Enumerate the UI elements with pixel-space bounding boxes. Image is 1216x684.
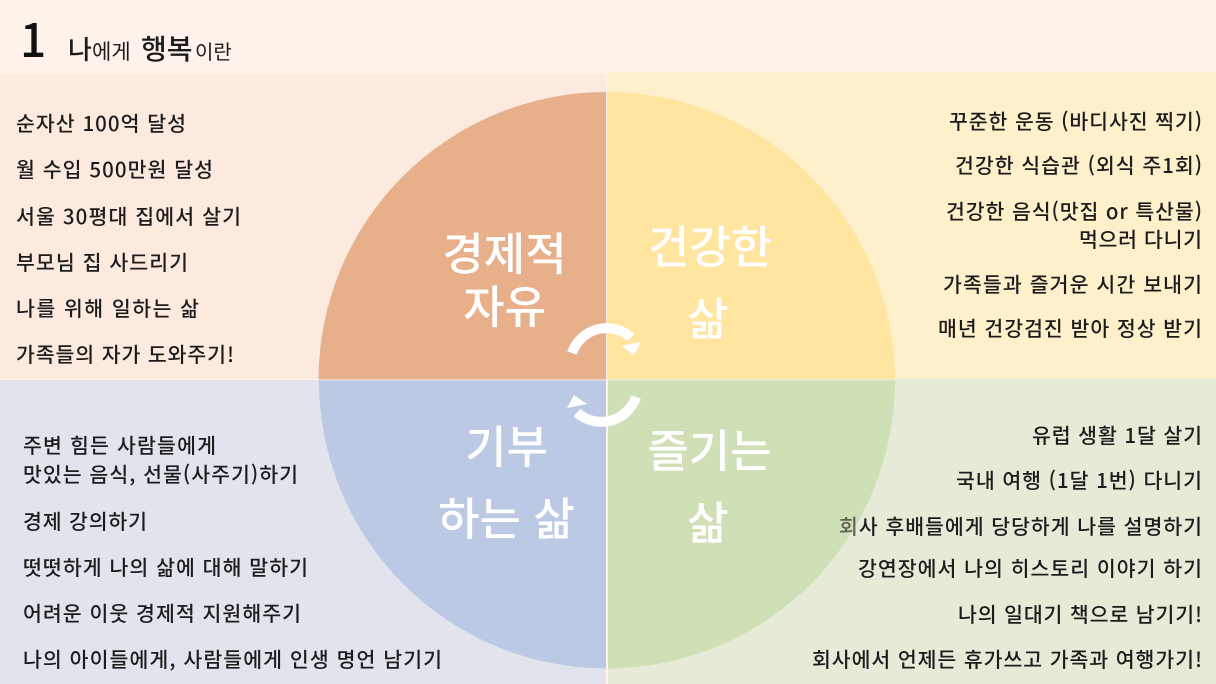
text block: enjoyment goals: 국내 여행 (1달 1번) 다니기	[956, 464, 1202, 494]
text block: enjoyment goals: 나의 일대기 책으로 남기기!	[958, 598, 1202, 628]
text block: health goals: 매년 건강검진 받아 정상 받기	[938, 312, 1202, 342]
label: economic freedom: 경제적	[442, 218, 567, 283]
text block: economic freedom goals: 서울 30평대 집에서 살기	[16, 200, 241, 230]
text block: health goals	[938, 105, 1202, 342]
text block: giving goals: 맛있는 음식, 선물(사주기)하기	[23, 458, 298, 488]
label: giving life: 기부	[465, 411, 548, 476]
label: giving life: 하는 삶	[438, 483, 575, 548]
text block: health goals: 가족들과 즐거운 시간 보내기	[943, 268, 1202, 298]
text block: economic freedom goals: 가족들의 자가 도와주기!	[16, 338, 234, 368]
text block: giving goals: 주변 힘든 사람들에게	[23, 429, 216, 459]
quadrant: giving life	[319, 380, 606, 668]
text block: economic freedom goals: 순자산 100억 달성	[16, 107, 186, 137]
label: enjoying life: 삶	[687, 487, 729, 552]
text block: economic freedom goals	[16, 107, 241, 368]
panel: top left background	[0, 74, 606, 379]
text block: giving goals: 나의 아이들에게, 사람들에게 인생 명언 남기기	[23, 643, 442, 673]
quadrant: economic freedom	[318, 92, 606, 380]
quadrant: enjoying life	[608, 380, 895, 668]
text block: giving goals: 경제 강의하기	[23, 505, 147, 535]
text block: giving goals	[23, 429, 442, 673]
text block: giving goals: 떳떳하게 나의 삶에 대해 말하기	[23, 551, 308, 581]
panel: top right background	[607, 72, 1216, 379]
text block: enjoyment goals: 강연장에서 나의 히스토리 이야기 하기	[858, 552, 1202, 582]
text block: economic freedom goals: 월 수입 500만원 달성	[16, 153, 213, 183]
arrow: lower clockwise	[567, 395, 636, 422]
text block: giving goals: 어려운 이웃 경제적 지원해주기	[23, 597, 301, 627]
title: 나	[68, 30, 92, 67]
label: giving life	[438, 411, 575, 548]
label: economic freedom	[442, 218, 567, 336]
title: 1	[20, 5, 46, 71]
panel: bottom right background	[608, 379, 1216, 684]
title: 이란	[195, 36, 232, 65]
title	[20, 5, 232, 71]
panel: bottom left background	[0, 380, 606, 684]
arrow: upper clockwise	[572, 328, 641, 355]
quadrant: healthy life	[607, 92, 895, 379]
label: healthy life	[648, 211, 772, 348]
text block: health goals: 먹으러 다니기	[1079, 223, 1202, 253]
label: enjoying life	[647, 415, 772, 552]
text block: economic freedom goals: 부모님 집 사드리기	[16, 246, 188, 276]
text block: health goals: 꾸준한 운동 (바디사진 찍기)	[949, 105, 1202, 135]
text block: economic freedom goals: 나를 위해 일하는 삶	[16, 292, 199, 322]
label: economic freedom: 자유	[463, 271, 546, 336]
text block: enjoyment goals: 유럽 생활 1달 살기	[1032, 419, 1202, 449]
text block: health goals: 건강한 식습관 (외식 주1회)	[955, 149, 1202, 179]
text block: enjoyment goals: 회사 후배들에게 당당하게 나를 설명하기	[839, 510, 1202, 540]
title: 에게	[92, 36, 131, 66]
title: 행복	[141, 28, 193, 68]
text block: enjoyment goals	[812, 419, 1202, 673]
text block: enjoyment goals: 회사에서 언제든 휴가쓰고 가족과 여행가기!	[812, 643, 1202, 673]
label: enjoying life: 즐기는	[647, 415, 772, 480]
label: healthy life: 삶	[687, 283, 729, 348]
text block: health goals: 건강한 음식(맛집 or 특산물)	[946, 195, 1202, 225]
label: healthy life: 건강한	[648, 211, 772, 276]
